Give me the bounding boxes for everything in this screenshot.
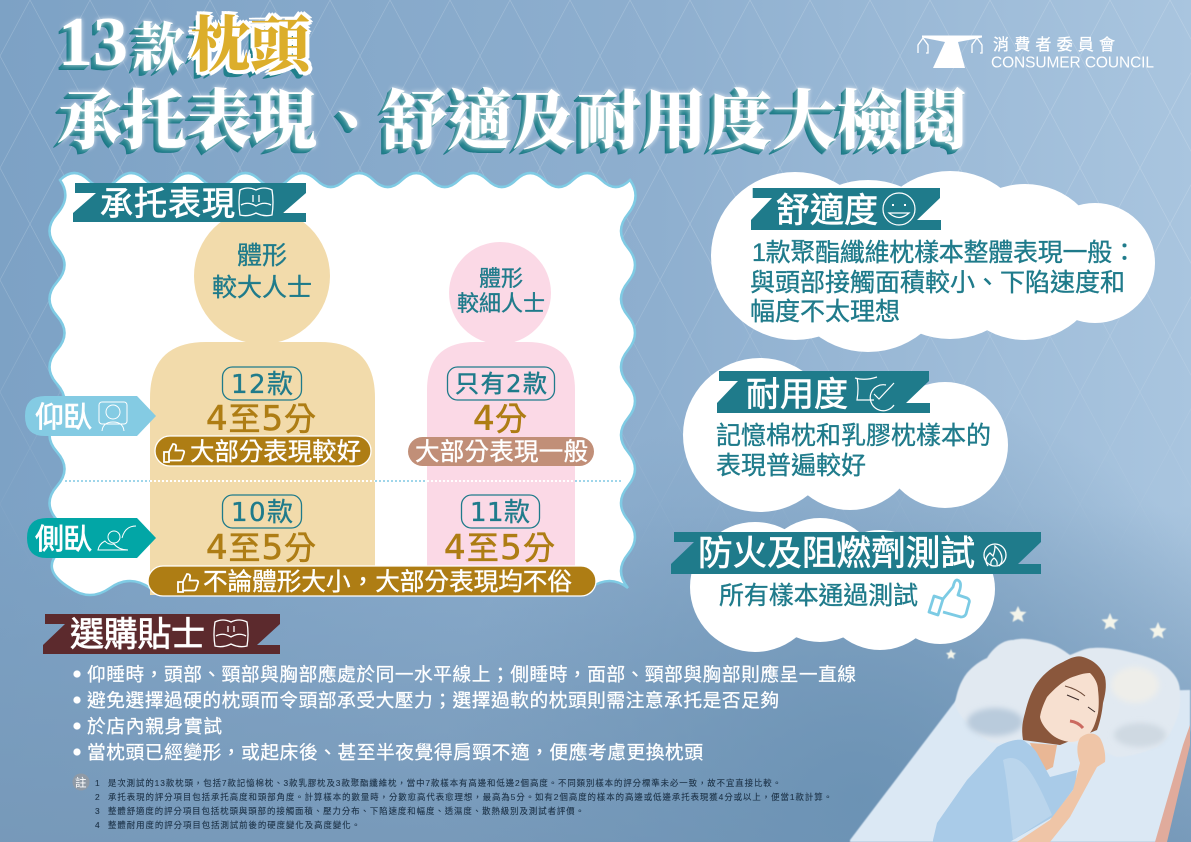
pill: mostly good: 大部分表現較好 [190, 439, 361, 466]
body text: 1款聚酯纖維枕樣本整體表現一般： [752, 239, 1137, 267]
pillow shading [967, 667, 1166, 747]
note badge [72, 774, 90, 790]
banner: support performance [73, 183, 306, 222]
panel: comfort [711, 171, 1155, 352]
scale emblem [918, 36, 982, 68]
face [1040, 673, 1099, 742]
dotted divider [65, 480, 622, 482]
body text [716, 422, 991, 480]
panel: support performance [25, 173, 636, 596]
cell: supine small: 只有2款 [455, 370, 547, 398]
cell: supine small: 4分 [473, 399, 527, 439]
label: smaller body: 體形 [479, 266, 523, 291]
panel: fire test [671, 518, 1041, 652]
footnotes: 整體耐用度的評分項目包括測試前後的硬度變化及高度變化。 [108, 820, 360, 830]
cell: supine large: 12款 [231, 369, 293, 400]
cloud [683, 358, 1008, 512]
banner: durability: 耐用度 [746, 376, 848, 414]
banner: comfort [751, 188, 941, 230]
body text [750, 239, 1137, 326]
tips list: 當枕頭已經變形，或起床後、甚至半夜覺得肩頸不適，便應考慮更換枕頭 [87, 742, 703, 763]
banner: comfort: 舒適度 [776, 192, 878, 230]
icon: thumbs up [929, 580, 969, 617]
logo: consumer council: CONSUMER COUNCIL [991, 54, 1154, 72]
cloud [690, 518, 995, 652]
footnotes [72, 774, 832, 830]
neck [1030, 743, 1057, 772]
title highlight: 枕頭 [190, 13, 310, 79]
cell: side large: 4至5分 [206, 528, 316, 568]
tips list [74, 664, 856, 763]
tips list: 於店內親身實試 [87, 716, 222, 737]
label: larger body [212, 242, 312, 302]
cloud [711, 171, 1155, 352]
label: larger body: 體形 [237, 242, 287, 270]
large figure [150, 208, 375, 595]
title line 1 [58, 4, 313, 81]
banner: fire test: 防火及阻燃劑測試 [698, 535, 975, 573]
label: larger body: 較大人士 [212, 274, 312, 302]
hair [1022, 656, 1106, 745]
small figure [427, 242, 575, 595]
stars [946, 606, 1166, 659]
footnotes: 承托表現的評分項目包括承托高度和頭部角度。計算樣本的數量時，分數愈高代表愈理想，最高為5分。如有2個高度的樣本的高邊或低邊承托表現獲4分或以上，便當1款計算。 [108, 792, 832, 802]
footnotes: 2 [95, 792, 100, 802]
cell: side large: 10款 [231, 497, 293, 528]
pillow [955, 639, 1180, 757]
banner: tips [43, 614, 280, 654]
panel: durability [683, 358, 1008, 512]
banner: support performance: 承托表現 [100, 185, 235, 222]
panel: buying tips [43, 614, 856, 763]
cell: side large [206, 495, 316, 568]
note badge: 註 [75, 776, 87, 790]
shirt [933, 740, 1077, 842]
wavy white panel [50, 173, 636, 595]
facial features [1065, 686, 1095, 728]
body text: 與頭部接觸面積較小、下陷速度和 [750, 269, 1125, 297]
cell: side small [444, 495, 555, 568]
footnotes: 是次測試的13款枕頭，包括7款記憶棉枕、3款乳膠枕及3款聚酯纖維枕，當中7款樣本有高邊和低邊2個高度。不同類別樣本的評分標準未必一致，故不宜直接比較。 [108, 778, 781, 788]
footnotes: 3 [95, 806, 100, 816]
arm and hand [1017, 734, 1105, 842]
cell: supine large [206, 367, 316, 439]
label: smaller body [457, 266, 545, 316]
tag: supine: 仰臥 [35, 401, 92, 434]
tag: side: 側臥 [35, 523, 92, 556]
body text: 所有樣本通過測試 [719, 582, 918, 610]
title line 2: 承托表現、舒適及耐用度大檢閱 [57, 86, 967, 158]
banner: fire test [671, 532, 1041, 574]
mattress edge [1155, 725, 1190, 842]
tag: supine [25, 396, 156, 436]
label: smaller body: 較細人士 [457, 291, 545, 316]
body text: 表現普遍較好 [716, 452, 866, 480]
mattress [850, 690, 1190, 842]
footnotes: 4 [95, 820, 100, 830]
sleeve [1003, 758, 1052, 840]
banner: durability [717, 371, 930, 414]
body text: 記憶棉枕和乳膠枕樣本的 [716, 422, 991, 450]
banner: tips: 選購貼士 [70, 616, 205, 654]
footnotes: 1 [95, 778, 100, 788]
cell: supine large: 4至5分 [206, 399, 316, 439]
title word: 款 [133, 21, 185, 78]
pill: mostly average: 大部分表現一般 [415, 438, 588, 466]
body text: 幅度不太理想 [750, 298, 900, 326]
logo: consumer council: 消費者委員會 [993, 36, 1115, 54]
cell: side small: 4至5分 [444, 528, 555, 568]
cell: side small: 11款 [470, 497, 530, 528]
title number: 13 [58, 4, 128, 81]
pill: all body types: 不論體形大小，大部分表現均不俗 [203, 568, 572, 596]
logo: consumer council [918, 36, 1154, 72]
tips list: 仰睡時，頭部、頸部與胸部應處於同一水平線上；側睡時，面部、頸部與胸部則應呈一直線 [87, 664, 856, 685]
cell: supine small [448, 367, 554, 439]
footnotes: 整體舒適度的評分項目包括枕頭與頭部的接觸面積、壓力分布、下陷速度和幅度、透濕度、散熱級別及測試者評價。 [108, 806, 584, 816]
tips list: 避免選擇過硬的枕頭而令頭部承受大壓力；選擇過軟的枕頭則需注意承托是否足夠 [87, 690, 779, 711]
tag: side [27, 518, 156, 558]
photo: woman sleeping on cloud pillow [850, 606, 1190, 842]
